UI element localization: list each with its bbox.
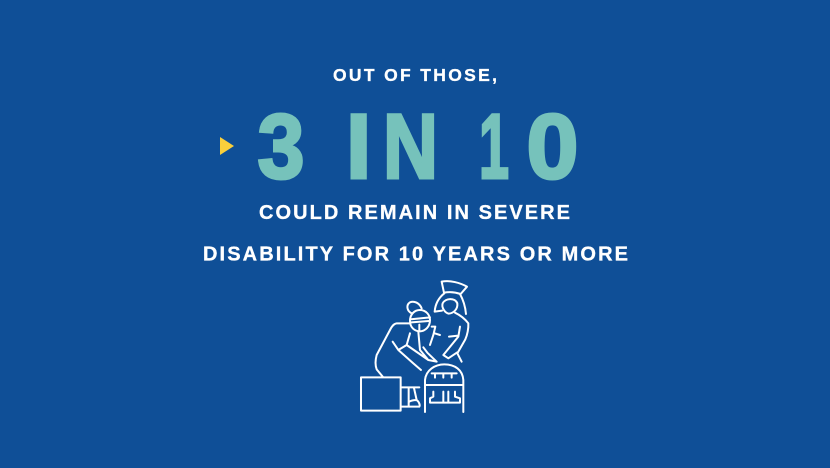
nurse body and arm <box>443 313 468 362</box>
cabinet shelves <box>430 373 460 403</box>
box seat <box>361 377 401 411</box>
patient sleeve and arms <box>393 332 437 370</box>
big statistic: 3 in 10: N <box>383 96 438 198</box>
nurse head and hair <box>435 293 466 314</box>
heading: out of those: OUT OF THOSE, <box>333 65 497 85</box>
text: disability for 10 years or more: DISABILITY FOR 10 YEARS OR MORE <box>203 244 628 266</box>
icon: yellow arrow marker <box>220 137 234 155</box>
big statistic: 3 in 10: 3 <box>258 96 304 198</box>
big statistic: 3 in 10: 0 <box>526 96 578 198</box>
icon: nurse caring for a patient <box>361 281 468 412</box>
nurse second hand <box>430 327 440 345</box>
text: could remain in severe: COULD REMAIN IN SEVERE <box>259 202 570 224</box>
big statistic: 3 in 10: I <box>346 96 371 198</box>
patient back and body <box>376 323 410 377</box>
patient hair bun and head <box>407 302 430 331</box>
stool and feet <box>401 387 420 407</box>
nurse cap <box>442 281 467 294</box>
cabinet <box>425 364 463 412</box>
big statistic: 3 in 10: 1 <box>479 96 509 198</box>
big statistic: 3 in 10 <box>258 96 578 198</box>
